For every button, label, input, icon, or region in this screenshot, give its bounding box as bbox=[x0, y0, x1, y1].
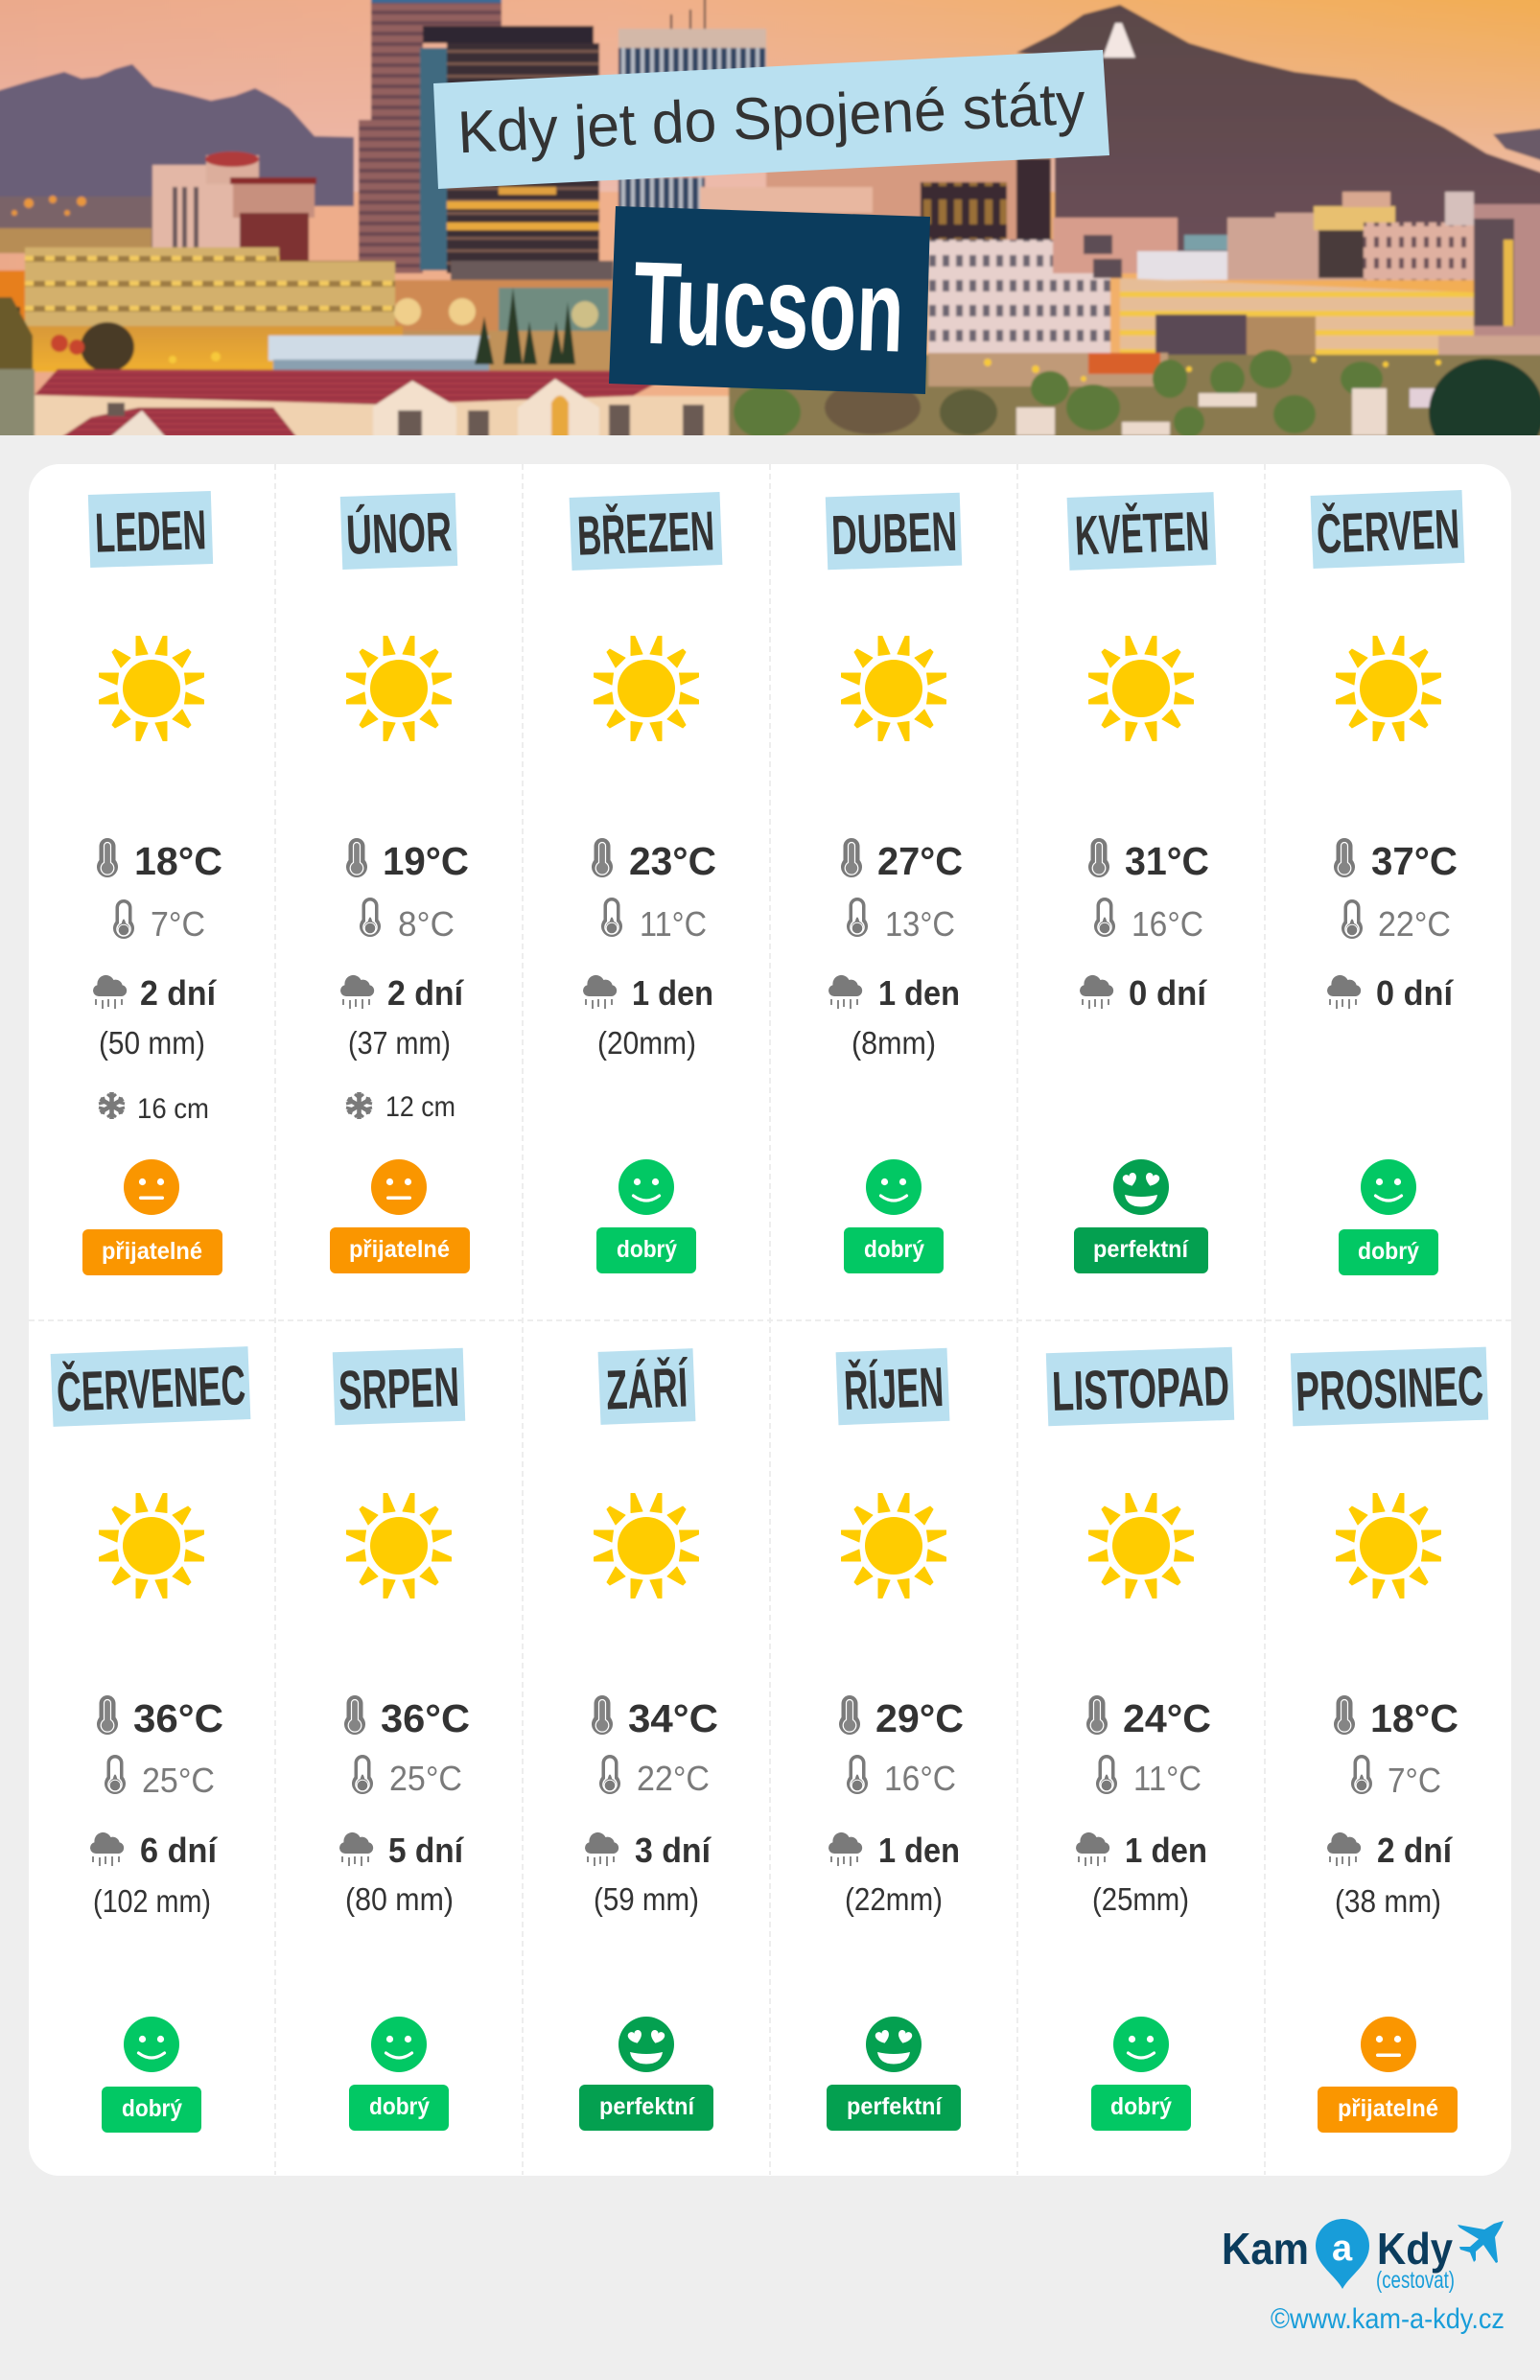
rainfall: (20mm) bbox=[597, 1025, 696, 1061]
panel: LEDEN bbox=[82, 491, 222, 1275]
snowfall: 16 cm bbox=[137, 1093, 209, 1125]
high temperature bbox=[592, 1695, 718, 1740]
rating badge: dobrý bbox=[864, 1236, 924, 1263]
icon: sun bbox=[1337, 637, 1440, 740]
low temperature: 11°C bbox=[640, 904, 707, 944]
logo: Kam a Kdy: (cestovat) bbox=[1376, 2267, 1455, 2294]
panel: DUBEN bbox=[826, 493, 963, 1273]
website copyright: ©www.kam-a-kdy.cz bbox=[1271, 2303, 1505, 2335]
rating badge bbox=[82, 1229, 222, 1275]
rating badge bbox=[1074, 1227, 1208, 1273]
month heading: LEDEN bbox=[94, 499, 207, 565]
low temperature: 16°C bbox=[884, 1759, 956, 1798]
month heading bbox=[51, 1346, 250, 1427]
logo: Kam a Kdy: Kdy bbox=[1377, 2224, 1453, 2274]
rainy days: 6 dní bbox=[140, 1831, 218, 1870]
low temperature: 7°C bbox=[1388, 1761, 1441, 1800]
rainy days: 1 den bbox=[878, 1831, 960, 1870]
rating badge bbox=[1339, 1229, 1438, 1275]
panel: KVĚTEN bbox=[1067, 492, 1216, 1273]
icon: sun bbox=[100, 1494, 203, 1598]
month heading bbox=[836, 1348, 949, 1425]
rainy days bbox=[1327, 1831, 1453, 1870]
rating badge bbox=[102, 2087, 201, 2133]
title banner bbox=[433, 50, 1109, 189]
low temperature bbox=[1342, 899, 1451, 944]
rating badge: dobrý bbox=[1358, 1238, 1419, 1265]
rating face bbox=[866, 1159, 922, 1215]
low temperature: 8°C bbox=[398, 904, 455, 944]
high temperature bbox=[97, 838, 222, 883]
rating face bbox=[866, 2017, 922, 2072]
low temperature: 25°C bbox=[142, 1761, 215, 1800]
rating badge bbox=[596, 1227, 696, 1273]
icon: sun bbox=[842, 1494, 945, 1598]
main card panel bbox=[29, 464, 1511, 2176]
panel: ČERVEN bbox=[1311, 490, 1464, 1275]
rainfall: (80 mm) bbox=[345, 1881, 454, 1917]
rating badge bbox=[579, 2085, 713, 2131]
month heading: ČERVENEC bbox=[56, 1354, 246, 1424]
high temperature bbox=[97, 1695, 223, 1740]
icon: sun bbox=[1089, 1494, 1193, 1598]
high temperature: 18°C bbox=[134, 839, 222, 883]
high temperature: 19°C bbox=[383, 839, 469, 883]
icon: airplane bbox=[1458, 2221, 1504, 2263]
rainy days bbox=[1080, 973, 1207, 1013]
rainfall: (50 mm) bbox=[99, 1025, 205, 1061]
low temperature: 22°C bbox=[1378, 904, 1451, 944]
rating face bbox=[371, 2017, 427, 2072]
low temperature bbox=[113, 899, 205, 944]
low temperature: 22°C bbox=[637, 1759, 710, 1798]
high temperature: 37°C bbox=[1371, 839, 1458, 883]
rainy days bbox=[828, 1831, 960, 1870]
snowfall bbox=[99, 1092, 209, 1125]
panel: BŘEZEN bbox=[570, 492, 722, 1273]
high temperature: 23°C bbox=[629, 839, 716, 883]
month heading: ÚNOR bbox=[345, 501, 453, 567]
rating badge bbox=[330, 1227, 470, 1273]
low temperature: 11°C bbox=[1133, 1759, 1202, 1798]
month heading bbox=[826, 493, 962, 570]
rating badge bbox=[827, 2085, 961, 2131]
rating badge bbox=[349, 2085, 449, 2131]
snowfall bbox=[346, 1091, 455, 1123]
rainy days: 1 den bbox=[878, 973, 960, 1013]
high temperature: 27°C bbox=[877, 839, 963, 883]
low temperature bbox=[847, 1755, 956, 1798]
high temperature bbox=[1088, 838, 1209, 883]
rating face bbox=[124, 2017, 179, 2072]
rainfall: (22mm) bbox=[845, 1881, 943, 1917]
low temperature bbox=[1351, 1755, 1441, 1800]
high temperature bbox=[839, 1695, 964, 1740]
rating face bbox=[1113, 1159, 1169, 1215]
low temperature bbox=[599, 1755, 710, 1798]
logo: Kam a Kdy bbox=[1222, 2219, 1504, 2294]
rating badge: perfektní bbox=[1093, 1236, 1189, 1263]
month heading bbox=[570, 492, 722, 571]
rainfall: (102 mm) bbox=[93, 1883, 211, 1919]
rainy days bbox=[828, 973, 960, 1013]
high temperature bbox=[841, 838, 963, 883]
panel: ÚNOR bbox=[330, 493, 470, 1273]
icon: sun bbox=[347, 1494, 451, 1598]
panel: ZÁŘÍ bbox=[579, 1348, 718, 2131]
rating face bbox=[1361, 1159, 1416, 1215]
icon: sun bbox=[595, 637, 698, 740]
month heading bbox=[598, 1348, 695, 1425]
rating badge: perfektní bbox=[847, 2093, 943, 2120]
snowfall: 12 cm bbox=[385, 1091, 455, 1123]
rainy days bbox=[585, 1831, 712, 1870]
month heading: SRPEN bbox=[338, 1356, 460, 1422]
rainy days: 0 dní bbox=[1129, 973, 1207, 1013]
rating badge: přijatelné bbox=[349, 1236, 450, 1263]
panel: ŘÍJEN bbox=[827, 1348, 964, 2131]
panel: PROSINEC bbox=[1291, 1347, 1488, 2133]
icon: sun bbox=[1089, 637, 1193, 740]
rating badge bbox=[1091, 2085, 1191, 2131]
rainfall: (8mm) bbox=[852, 1025, 936, 1061]
rating face bbox=[618, 1159, 674, 1215]
rainfall: (25mm) bbox=[1092, 1881, 1189, 1917]
rating badge: dobrý bbox=[1110, 2093, 1172, 2120]
rating badge bbox=[844, 1227, 944, 1273]
rainfall: (59 mm) bbox=[594, 1881, 699, 1917]
city name banner: Tucson bbox=[632, 237, 906, 377]
rainy days bbox=[90, 1831, 218, 1870]
low temperature: 7°C bbox=[151, 904, 205, 944]
high temperature bbox=[344, 1695, 470, 1740]
high temperature bbox=[1334, 838, 1458, 883]
high temperature: 18°C bbox=[1370, 1696, 1458, 1740]
low temperature: 13°C bbox=[885, 904, 955, 944]
low temperature bbox=[105, 1755, 215, 1800]
low temperature bbox=[601, 898, 707, 944]
high temperature: 36°C bbox=[133, 1696, 223, 1740]
rating face bbox=[1113, 2017, 1169, 2072]
low temperature bbox=[1096, 1755, 1202, 1798]
high temperature: 29°C bbox=[875, 1696, 964, 1740]
month heading bbox=[340, 493, 457, 570]
high temperature bbox=[1334, 1695, 1458, 1740]
rainfall: (38 mm) bbox=[1335, 1883, 1441, 1919]
month heading: DUBEN bbox=[830, 501, 958, 567]
month heading bbox=[1046, 1347, 1234, 1426]
low temperature bbox=[352, 1755, 462, 1798]
rating badge: přijatelné bbox=[102, 1238, 202, 1265]
month heading: LISTOPAD bbox=[1051, 1355, 1230, 1423]
icon: sun bbox=[1337, 1494, 1440, 1598]
month heading bbox=[88, 491, 213, 568]
rainy days bbox=[93, 973, 217, 1013]
rating badge: přijatelné bbox=[1338, 2095, 1438, 2122]
icon: sun bbox=[347, 637, 451, 740]
rainy days bbox=[583, 973, 713, 1013]
rainy days: 0 dní bbox=[1376, 973, 1454, 1013]
rainy days: 2 dní bbox=[140, 973, 217, 1013]
icon: map pin: a bbox=[1332, 2228, 1353, 2269]
city name banner bbox=[609, 206, 930, 394]
month heading: KVĚTEN bbox=[1074, 500, 1210, 568]
rainy days: 2 dní bbox=[387, 973, 464, 1013]
rating face bbox=[618, 2017, 674, 2072]
rainy days bbox=[339, 1831, 464, 1870]
rating face bbox=[371, 1159, 427, 1215]
rainy days bbox=[1076, 1831, 1207, 1870]
header photo: Tucson skyline at dusk bbox=[0, 0, 1540, 466]
low temperature: 25°C bbox=[389, 1759, 462, 1798]
low temperature: 16°C bbox=[1132, 904, 1203, 944]
low temperature bbox=[847, 898, 955, 944]
high temperature bbox=[346, 838, 469, 883]
rating badge: dobrý bbox=[122, 2095, 182, 2122]
high temperature bbox=[592, 838, 716, 883]
month heading bbox=[333, 1348, 465, 1425]
rainy days: 1 den bbox=[1125, 1831, 1207, 1870]
panel: SRPEN bbox=[333, 1348, 470, 2131]
high temperature: 31°C bbox=[1125, 839, 1209, 883]
month heading bbox=[1067, 492, 1216, 571]
low temperature bbox=[360, 898, 455, 944]
rainy days bbox=[1327, 973, 1454, 1013]
rainy days: 3 dní bbox=[635, 1831, 712, 1870]
icon: sun bbox=[595, 1494, 698, 1598]
rating face bbox=[124, 1159, 179, 1215]
month heading: BŘEZEN bbox=[576, 500, 715, 568]
rating badge: perfektní bbox=[599, 2093, 695, 2120]
rating badge: dobrý bbox=[617, 1236, 677, 1263]
month heading bbox=[1311, 490, 1464, 569]
rating badge: dobrý bbox=[369, 2093, 430, 2120]
rainy days: 1 den bbox=[632, 973, 713, 1013]
rainfall: (37 mm) bbox=[348, 1025, 451, 1061]
month heading: ŘÍJEN bbox=[843, 1356, 945, 1422]
icon: sun bbox=[842, 637, 945, 740]
panel: ČERVENEC bbox=[51, 1346, 250, 2133]
high temperature: 34°C bbox=[628, 1696, 718, 1740]
logo: Kam a Kdy: Kam bbox=[1222, 2224, 1309, 2274]
rating badge bbox=[1318, 2087, 1458, 2133]
rainy days: 5 dní bbox=[388, 1831, 464, 1870]
month heading: ZÁŘÍ bbox=[605, 1356, 689, 1422]
rainy days bbox=[340, 973, 464, 1013]
icon: map pin bbox=[1316, 2219, 1369, 2289]
high temperature: 24°C bbox=[1123, 1696, 1211, 1740]
high temperature: 36°C bbox=[381, 1696, 470, 1740]
panel: LISTOPAD bbox=[1046, 1347, 1234, 2131]
low temperature bbox=[1094, 898, 1203, 944]
title banner: Kdy jet do Spojené státy bbox=[456, 71, 1086, 166]
rating face bbox=[1361, 2017, 1416, 2072]
rainy days: 2 dní bbox=[1377, 1831, 1453, 1870]
icon: sun bbox=[100, 637, 203, 740]
high temperature bbox=[1086, 1695, 1211, 1740]
